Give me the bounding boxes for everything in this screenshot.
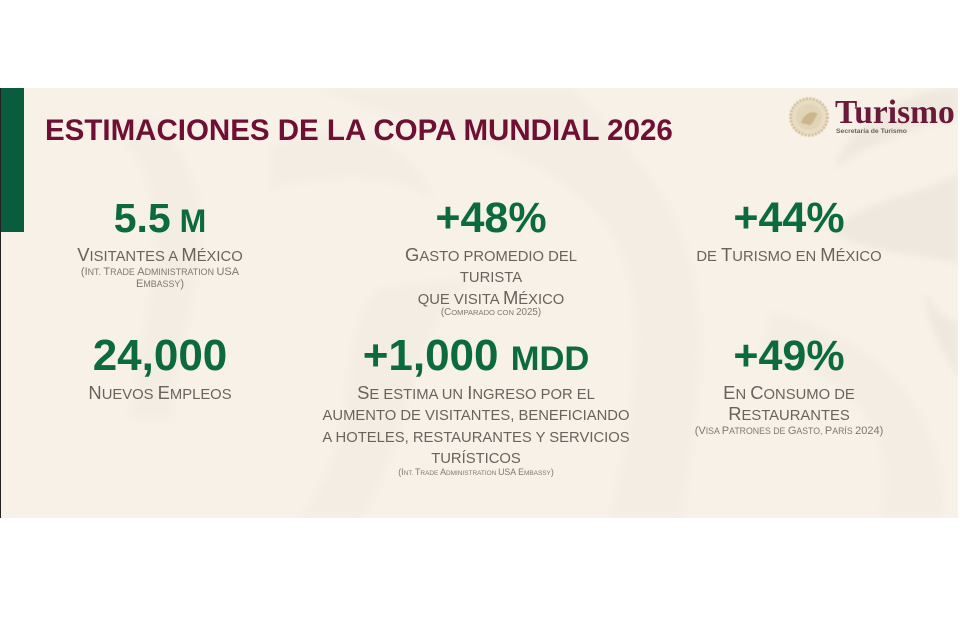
value: +48% [435,194,547,242]
value: +49% [733,332,845,380]
logo: Turismo [788,94,955,138]
source [81,266,239,290]
wordmark: Turismo [835,94,955,131]
stat: visitors [77,195,243,290]
source: EMBASSY) [136,278,184,290]
label: EN CONSUMO DE [723,382,855,402]
label: TURISTA [460,270,522,286]
value: +44% [733,194,845,242]
label: VISITANTES A MÉXICO [77,244,243,264]
label: RESTAURANTES [728,403,850,424]
value: +1,000 MDD [363,331,589,380]
source: (INT. TRADE ADMINISTRATION USA EMBASSY) [398,466,554,476]
value: 5.5 M [114,195,206,241]
label: DE TURISMO EN MÉXICO [696,244,882,264]
panel: slide background [1,88,958,518]
label [322,382,630,467]
label: QUE VISITA MÉXICO [418,286,564,308]
source: (VISA PATRONES DE GASTO, PARÍS 2024) [695,425,883,437]
value: 24,000 [93,331,227,380]
label: NUEVOS EMPLEOS [88,382,232,402]
source: (INT. TRADE ADMINISTRATION USA [81,266,239,278]
stat: restaurants [695,332,883,437]
label: SE ESTIMA UN INGRESO POR EL [357,382,595,402]
stat: income [322,331,630,477]
title: ESTIMACIONES DE LA COPA MUNDIAL 2026 [45,114,673,147]
left edge line [0,88,1,518]
label [723,382,855,424]
label [405,244,577,308]
label: AUMENTO DE VISITANTES, BENEFICIANDO [323,408,629,424]
icon: national seal [788,96,830,138]
label: GASTO PROMEDIO DEL [405,244,577,264]
stat: jobs [88,331,232,402]
source: (COMPARADO CON 2025) [441,307,541,318]
stat: average spend [405,194,577,318]
label: A HOTELES, RESTAURANTES Y SERVICIOS [322,430,630,446]
green accent bar [1,88,24,232]
stat: tourism [696,194,882,264]
label: TURÍSTICOS [431,451,521,467]
wordmark subtitle: Secretaría de Turismo [836,128,907,135]
